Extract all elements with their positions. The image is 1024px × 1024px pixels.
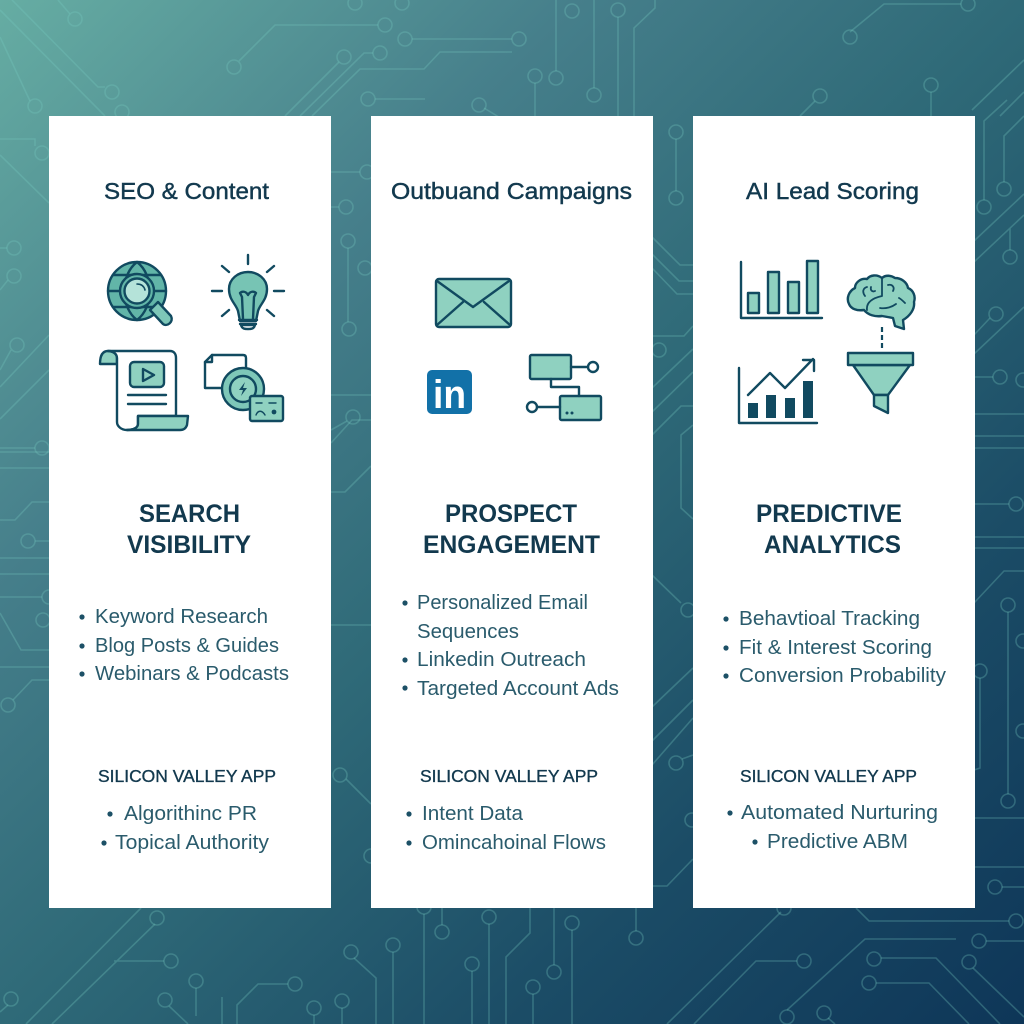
list: Silicon Valley App items: Algorithinc PR — [124, 802, 257, 825]
list: Silicon Valley App items: Predictive ABM — [767, 830, 908, 853]
heading: Search Visibility — [127, 500, 251, 559]
icon: bar chart — [741, 261, 822, 318]
panel: Outbound Campaigns — [371, 116, 653, 908]
heading: Prospect Engagement — [423, 500, 600, 559]
list: Silicon Valley App items: Omincahoinal Flows — [422, 831, 606, 854]
icon: funnel — [848, 353, 913, 413]
icon: trend chart with arrow — [739, 359, 817, 423]
icon: workflow diagram — [527, 355, 601, 420]
arrow: dashed connector — [881, 327, 883, 348]
list: predictive analytics items: Conversion Probability — [739, 664, 947, 687]
icon: light bulb — [212, 255, 284, 329]
list: search visibility items: Keyword Research — [95, 605, 268, 628]
list: prospect engagement items: Sequences — [417, 620, 519, 643]
list: Silicon Valley App items: Intent Data — [422, 802, 524, 825]
icon: media document with badge — [205, 355, 283, 421]
subheading: Silicon Valley App: SILICON VALLEY APP — [98, 766, 276, 786]
list: search visibility items: Blog Posts & Guides — [95, 634, 279, 657]
heading: Prospect Engagement: PROSPECT — [445, 500, 577, 528]
list: Silicon Valley App items — [406, 802, 606, 854]
list: search visibility items: Webinars & Podcasts — [95, 662, 289, 685]
list: prospect engagement items: Targeted Account Ads — [417, 677, 619, 700]
heading: AI Lead Scoring: AI Lead Scoring — [746, 178, 919, 204]
icon: LinkedIn: in — [433, 373, 466, 417]
subheading: Silicon Valley App: SILICON VALLEY APP — [420, 766, 598, 786]
list: predictive analytics items — [723, 607, 947, 687]
panel: AI Lead Scoring — [693, 116, 975, 908]
heading: Predictive Analytics: PREDICTIVE — [756, 500, 902, 528]
heading: Search Visibility: VISIBILITY — [127, 531, 251, 559]
heading: SEO & Content: SEO & Content — [104, 178, 270, 204]
list: Silicon Valley App items — [727, 801, 938, 853]
list: Silicon Valley App items: Automated Nurturing — [741, 801, 938, 824]
list: Silicon Valley App items — [101, 802, 270, 854]
list: prospect engagement items: Linkedin Outreach — [417, 648, 586, 671]
heading: Search Visibility: SEARCH — [139, 500, 240, 528]
icon: brain — [848, 275, 915, 329]
icon: video scroll document — [100, 351, 188, 430]
list: predictive analytics items: Fit & Interest Scoring — [739, 636, 932, 659]
list: prospect engagement items — [402, 591, 619, 700]
subheading: Silicon Valley App: SILICON VALLEY APP — [740, 766, 917, 786]
heading: Predictive Analytics: ANALYTICS — [764, 531, 901, 559]
icon: globe with magnifying glass — [108, 262, 172, 325]
heading: Outbuand Campaigns: Outbuand Campaigns — [391, 178, 632, 204]
heading: Prospect Engagement: ENGAGEMENT — [423, 531, 600, 559]
list: Silicon Valley App items: Topical Authority — [115, 831, 270, 854]
list: prospect engagement items: Personalized Email — [417, 591, 588, 614]
list: predictive analytics items: Behavtioal Tracking — [739, 607, 920, 630]
heading: Predictive Analytics — [756, 500, 902, 559]
list: search visibility items — [79, 605, 289, 685]
panel: SEO & Content — [49, 116, 331, 908]
icon: envelope — [436, 279, 511, 327]
